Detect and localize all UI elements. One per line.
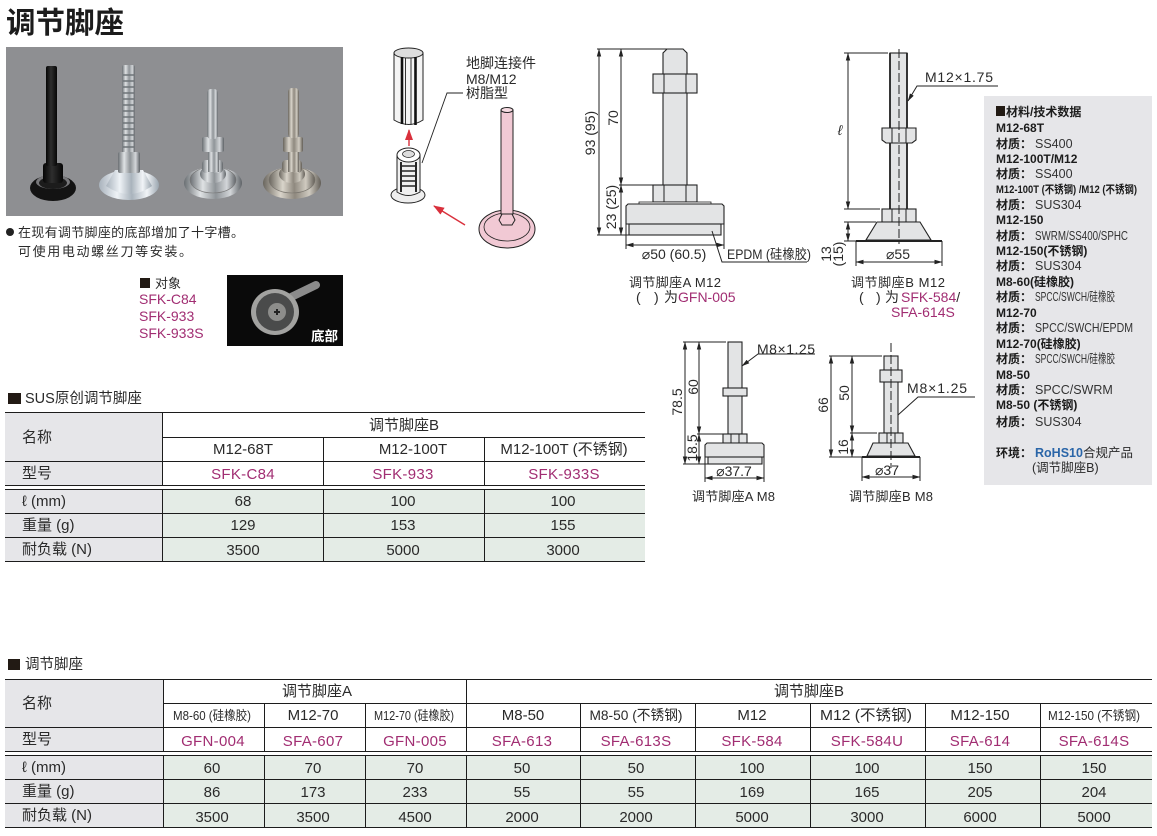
caption: (: [636, 289, 641, 305]
row: length: 100: [739, 760, 765, 777]
dimensions: ⌀37: [875, 462, 899, 478]
part outline: [856, 49, 942, 244]
row: weight: 173: [300, 784, 326, 801]
table: leveling feet: [5, 679, 1152, 828]
dimensions: 66: [815, 397, 831, 413]
materials list: SUS304: [1035, 198, 1082, 212]
row: name: M8-60 (硅橡胶): [173, 708, 251, 723]
diagram: foot B M8: [815, 343, 975, 504]
row: load: 6000: [963, 809, 997, 826]
environment note: [996, 445, 1133, 475]
materials list: SUS304: [1035, 259, 1082, 273]
row: weight: 169: [739, 784, 765, 801]
caption: 为: [885, 289, 899, 305]
dimensions: 50: [836, 385, 852, 401]
row: weight: 55: [514, 784, 530, 801]
title: 调节脚座: [6, 7, 124, 40]
row: model: 型号: [22, 465, 52, 482]
dimensions: ℓ: [837, 122, 843, 138]
row: load: 3000: [546, 542, 580, 559]
row: weight: 165: [854, 784, 880, 801]
row: length: 100: [390, 493, 416, 510]
dimensions: [582, 49, 811, 262]
diagram: foot A M12: [582, 49, 811, 305]
row: load: [22, 541, 580, 559]
caption: (: [859, 289, 864, 305]
row: model: SFK-933: [372, 466, 434, 483]
row: name: M12 (不锈钢): [820, 707, 912, 724]
row: name: M12-70 (硅橡胶): [374, 708, 454, 723]
icon: stainless foot: [263, 88, 321, 199]
environment note: RoHS10合规产品: [1035, 445, 1133, 460]
row: name: M12-70: [288, 707, 338, 724]
row: model: SFK-C84: [211, 466, 275, 483]
row: weight: 重量 (g): [22, 517, 75, 534]
materials list: [996, 121, 1137, 429]
materials list: 材质：: [996, 320, 1032, 335]
row: weight: 重量 (g): [22, 783, 75, 800]
materials list: SPCC/SWCH/硅橡胶: [1035, 351, 1115, 366]
caption: ): [654, 289, 659, 305]
panel: materials and technical data: [984, 96, 1152, 485]
row: length: 150: [1081, 760, 1107, 777]
row: weight: 153: [390, 517, 416, 534]
row: name: 名称: [22, 429, 52, 446]
row: model: SFA-614S: [1059, 733, 1129, 750]
bottom view photo: 底部: [311, 328, 338, 344]
row: name: 调节脚座B: [369, 417, 439, 434]
materials list: 材质：: [996, 258, 1032, 273]
diagram: foot A M8: [669, 341, 815, 504]
description text: [6, 225, 244, 259]
leader line: [422, 93, 463, 163]
row: name: M8-50: [502, 707, 544, 724]
row: weight: 155: [550, 517, 576, 534]
row: model: SFA-614: [950, 733, 1010, 750]
materials list: 材质：: [996, 289, 1032, 304]
materials list: 材质：: [996, 197, 1032, 212]
row: length: 50: [628, 760, 644, 777]
row: name: M12-100T: [379, 441, 447, 458]
arrow: into foot: [434, 206, 465, 225]
panel heading: 材料/技术数据: [1006, 104, 1081, 119]
materials list: SS400: [1035, 167, 1073, 181]
row: model: [22, 731, 1129, 750]
row: name: 调节脚座A: [282, 683, 352, 700]
row: load: 耐负载 (N): [22, 807, 92, 824]
icon: black leveling foot: [30, 66, 76, 201]
row: length: 50: [514, 760, 530, 777]
caption: 调节脚座B M12: [851, 275, 945, 290]
row: length: [22, 759, 1107, 777]
materials list: 材质：: [996, 414, 1032, 429]
row: name: M12-150: [950, 707, 1010, 724]
description text: 可使用电动螺丝刀等安装。: [18, 244, 192, 259]
target product list: SFK-933S: [139, 325, 204, 341]
materials list: M12-68T: [996, 121, 1045, 135]
row: model: GFN-004: [181, 733, 245, 750]
row: length: 150: [967, 760, 993, 777]
row: name: [22, 417, 628, 458]
row: name: 调节脚座B: [774, 683, 844, 700]
materials list: SPCC/SWCH/硅橡胶: [1035, 289, 1115, 304]
row: length: 70: [305, 760, 321, 777]
row: name: M12-68T: [213, 441, 273, 458]
row: name: M8-50 (不锈钢): [590, 707, 682, 723]
diagram: foot B M12: [818, 49, 998, 320]
row: weight: 205: [967, 784, 993, 801]
row: load: 5000: [1077, 809, 1111, 826]
materials list: M8-50 (不锈钢): [996, 397, 1077, 412]
row: length: [22, 493, 576, 510]
dimensions: 13: [818, 246, 834, 262]
row: length: 100: [854, 760, 880, 777]
row: name: 名称: [22, 695, 52, 712]
materials list: 材质：: [996, 136, 1032, 151]
row: load: 2000: [505, 809, 539, 826]
environment note: (调节脚座B): [1032, 460, 1099, 475]
row: weight: 204: [1081, 784, 1107, 801]
dimensions: M12×1.75: [925, 69, 993, 85]
row: length: 60: [204, 760, 220, 777]
materials list: M12-70: [996, 306, 1037, 320]
row: name: M12-100T (不锈钢): [500, 441, 628, 458]
part outline: [862, 343, 920, 468]
row: weight: [22, 783, 1107, 801]
materials list: SS400: [1035, 137, 1073, 151]
row: load: 5000: [735, 809, 769, 826]
part outline: [705, 342, 764, 464]
row: length: 100: [550, 493, 576, 510]
materials list: 材质：: [996, 166, 1032, 181]
row: load: 3000: [850, 809, 884, 826]
arrow: sleeve up: [408, 130, 410, 146]
row: weight: 55: [628, 784, 644, 801]
label: connector: 树脂型: [466, 85, 508, 101]
row: length: 68: [235, 493, 251, 510]
row: load: 3500: [195, 809, 229, 826]
materials list: 材质：: [996, 382, 1032, 397]
caption: SFA-614S: [891, 304, 955, 320]
table: SUS original leveling feet: [5, 412, 645, 562]
dimensions: M8×1.25: [757, 341, 815, 357]
row: name: M12-150 (不锈钢): [1048, 708, 1140, 723]
heading: SUS table: SUS原创调节脚座: [25, 390, 142, 407]
materials list: M8-60(硅橡胶): [996, 274, 1074, 289]
caption: GFN-005: [678, 289, 736, 305]
dimensions: M8×1.25: [907, 380, 967, 396]
target product list: SFK-C84: [139, 291, 197, 307]
materials list: 材质：: [996, 351, 1032, 366]
row: model: 型号: [22, 731, 52, 748]
materials list: M12-70(硅橡胶): [996, 336, 1081, 351]
row: model: GFN-005: [383, 733, 447, 750]
row: name: [22, 683, 1140, 724]
dimensions: 93 (95): [582, 111, 598, 155]
icon: steel foot: [184, 89, 242, 199]
materials list: SPCC/SWCH/EPDM: [1035, 321, 1133, 335]
row: weight: [22, 517, 576, 534]
dimensions: 16: [835, 439, 851, 455]
icon: threaded zinc foot: [99, 65, 159, 200]
label: connector: 地脚连接件: [466, 55, 536, 71]
materials list: M12-100T (不锈钢) /M12 (不锈钢): [996, 182, 1137, 196]
row: load: 2000: [619, 809, 653, 826]
heading: main table: 调节脚座: [25, 656, 83, 673]
row: load: 3500: [296, 809, 330, 826]
dimensions: 78.5: [669, 388, 685, 416]
row: weight: 86: [204, 784, 220, 801]
materials list: M12-150: [996, 213, 1044, 227]
caption: [851, 275, 960, 320]
row: name: M12: [737, 707, 767, 724]
row: load: 5000: [386, 542, 420, 559]
dimensions: [669, 341, 815, 482]
row: load: 4500: [398, 809, 432, 826]
row: length: 70: [407, 760, 423, 777]
row: length: ℓ (mm): [22, 759, 66, 776]
materials list: SUS304: [1035, 415, 1082, 429]
row: load: 耐负载 (N): [22, 541, 92, 558]
label: connector: [466, 55, 536, 101]
dimensions: EPDM (硅橡胶): [727, 246, 811, 262]
materials list: M12-100T/M12: [996, 152, 1078, 166]
row: length: ℓ (mm): [22, 493, 66, 510]
row: model: SFA-613S: [601, 733, 671, 750]
dimensions: 18.5: [684, 434, 700, 462]
target product list: [139, 276, 204, 341]
dimensions: 60: [685, 379, 701, 395]
caption: 为: [664, 289, 678, 305]
materials list: SWRM/SS400/SPHC: [1035, 229, 1128, 243]
connector sleeve: [394, 48, 423, 125]
caption: /: [956, 289, 960, 305]
row: model: SFK-933S: [528, 466, 600, 483]
connector insert: [391, 148, 425, 203]
product photo: [6, 47, 343, 216]
label: connector: M8/M12: [466, 71, 517, 87]
materials list: M12-150(不锈钢): [996, 243, 1087, 258]
dimensions: (15): [830, 242, 846, 266]
target product list: SFK-933: [139, 308, 194, 324]
description text: 在现有调节脚座的底部增加了十字槽。: [18, 225, 244, 240]
caption: 调节脚座A M8: [692, 489, 775, 504]
dimensions: [815, 356, 975, 481]
row: load: [22, 807, 1111, 826]
target product list: 对象: [155, 276, 181, 291]
part outline: [626, 49, 724, 235]
row: model: SFK-584U: [831, 733, 903, 750]
row: load: 3500: [226, 542, 260, 559]
dimensions: ⌀50 (60.5): [642, 246, 706, 262]
caption: 调节脚座A M12: [629, 275, 721, 290]
environment note: 环境：: [996, 445, 1032, 460]
row: weight: 129: [230, 517, 256, 534]
row: model: SFK-584: [721, 733, 783, 750]
materials list: 材质：: [996, 228, 1032, 243]
materials list: SPCC/SWRM: [1035, 383, 1113, 397]
pink foot: [479, 108, 535, 248]
materials list: M8-50: [996, 368, 1030, 382]
dimensions: [818, 53, 998, 266]
row: weight: 233: [402, 784, 428, 801]
caption: ): [876, 289, 881, 305]
exploded connector diagram: [391, 48, 536, 248]
row: model: SFA-613: [492, 733, 552, 750]
dimensions: 23 (25): [603, 185, 619, 229]
dimensions: ⌀55: [886, 246, 910, 262]
row: model: SFA-607: [283, 733, 343, 750]
caption: SFK-584: [901, 289, 956, 305]
dimensions: ⌀37.7: [716, 463, 752, 479]
caption: [629, 275, 736, 305]
caption: 调节脚座B M8: [849, 489, 933, 504]
row: model: [22, 465, 600, 483]
bottom view photo: [227, 275, 343, 346]
dimensions: 70: [605, 110, 621, 126]
